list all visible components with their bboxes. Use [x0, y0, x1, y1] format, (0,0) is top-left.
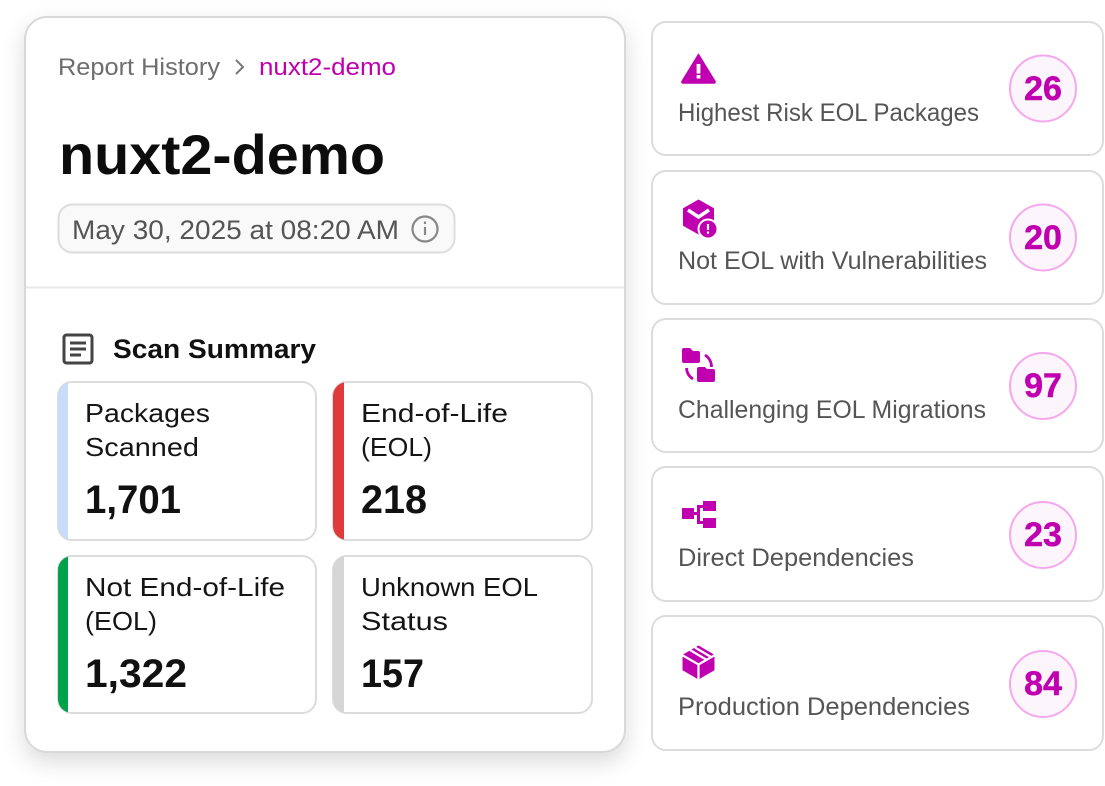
stat card: unknown eol status: 157 [361, 652, 424, 696]
breadcrumb: nuxt2-demo [259, 54, 396, 81]
count badge [1010, 651, 1076, 717]
date pill [58, 204, 454, 252]
stat card: unknown eol status [333, 556, 592, 713]
count badge: 97 [1024, 367, 1062, 405]
panel: production dependencies: Production Dependencies [678, 693, 970, 721]
panel: direct dependencies: Direct Dependencies [678, 544, 914, 572]
icon: dependency tree [682, 501, 716, 528]
title: nuxt2-demo [59, 123, 385, 186]
heading: scan summary: Scan Summary [113, 334, 316, 364]
icon: warning triangle [682, 54, 715, 83]
stat card: unknown eol status: Unknown EOL [361, 572, 538, 602]
stat card: packages scanned: Scanned [85, 432, 199, 462]
count badge [1010, 56, 1076, 122]
count badge [1010, 204, 1076, 270]
panel: not eol with vulnerabilities [652, 171, 1103, 304]
count badge [1010, 353, 1076, 419]
panel: not eol with vulnerabilities: Not EOL with Vulnerabilities [678, 247, 987, 275]
stat card: packages scanned: Packages [85, 398, 210, 428]
stat card: end-of-life: 218 [361, 478, 427, 522]
stat card: unknown eol status: Status [361, 606, 448, 636]
date pill: May 30, 2025 at 08:20 AM [72, 215, 399, 245]
stat card: end-of-life: (EOL) [361, 432, 432, 462]
icon: package box [682, 646, 715, 680]
icon: folder migration [682, 348, 715, 382]
stat card: not end-of-life: 1,322 [85, 652, 187, 696]
stat card: packages scanned: 1,701 [85, 478, 181, 522]
panel: challenging eol migrations: Challenging EOL Migrations [678, 396, 986, 424]
count badge: 20 [1024, 219, 1062, 257]
breadcrumb [58, 54, 396, 81]
count badge: 26 [1024, 70, 1062, 108]
count badge: 23 [1024, 516, 1062, 554]
panel: highest risk eol packages: Highest Risk EOL Packages [678, 99, 979, 127]
icon: summary document [64, 335, 92, 363]
icon: package with alert [684, 200, 718, 238]
stat card: not end-of-life: Not End-of-Life [85, 572, 285, 602]
stat card: not end-of-life [58, 556, 316, 713]
count badge: 84 [1024, 665, 1062, 703]
breadcrumb: Report History [58, 54, 220, 81]
stat card: not end-of-life: (EOL) [85, 606, 157, 636]
stat card: packages scanned [58, 382, 316, 540]
stat card: end-of-life [333, 382, 592, 540]
panel: highest risk eol packages [652, 22, 1103, 155]
icon: info [412, 216, 438, 242]
panel: report summary [25, 17, 625, 752]
stat card: end-of-life: End-of-Life [361, 398, 508, 428]
panel: production dependencies [652, 616, 1103, 750]
panel: challenging eol migrations [652, 319, 1103, 452]
panel: direct dependencies [652, 467, 1103, 601]
count badge [1010, 502, 1076, 568]
